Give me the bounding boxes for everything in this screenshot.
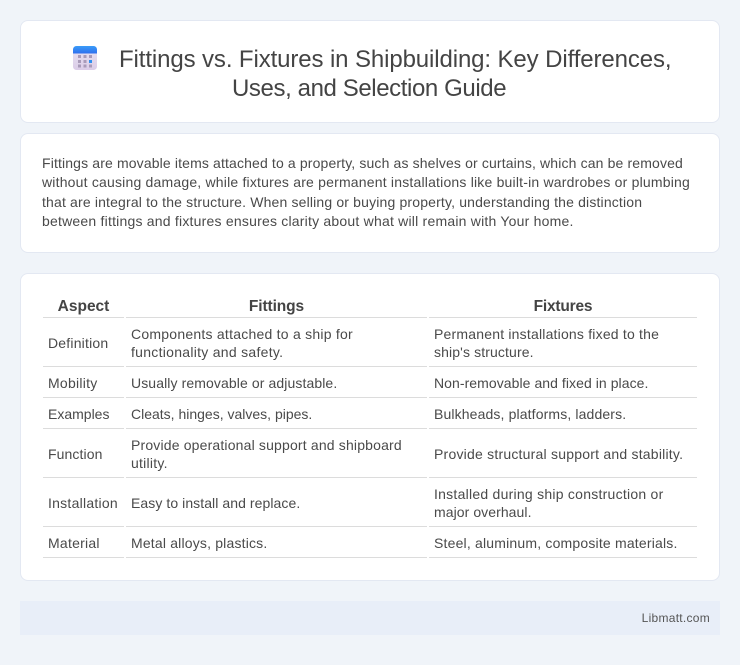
intro paragraph: that are integral to the structure. When selling or buying property, understanding the distinction: [42, 194, 642, 210]
row: definition: ship's structure.: [434, 344, 534, 360]
footer credit: Libmatt.com: [642, 611, 710, 625]
title: Fittings vs. Fixtures in Shipbuilding: Key Differences,: [119, 46, 671, 73]
footer bar: [20, 601, 720, 635]
comparison table panel: [20, 273, 720, 581]
row: function: Provide structural support and stability.: [434, 446, 683, 462]
row: material: Metal alloys, plastics.: [131, 535, 267, 551]
row: material: Steel, aluminum, composite materials.: [434, 535, 678, 551]
row: definition: Permanent installations fixed to the: [434, 326, 659, 342]
row: examples: Cleats, hinges, valves, pipes.: [131, 406, 312, 422]
table header: Fittings: [249, 298, 304, 315]
row: examples: [48, 406, 626, 422]
table header: Fixtures: [534, 298, 592, 315]
row: mobility: Non-removable and fixed in place.: [434, 375, 648, 391]
row: installation: [48, 486, 664, 520]
row: installation: Easy to install and replace.: [131, 495, 300, 511]
row: function: Provide operational support and shipboard: [131, 437, 402, 453]
row: installation: Installation: [48, 495, 118, 511]
row: mobility: Usually removable or adjustable.: [131, 375, 337, 391]
title: Uses, and Selection Guide: [232, 75, 506, 102]
row: function: [48, 437, 683, 471]
intro paragraph: Fittings are movable items attached to a property, such as shelves or curtains, which can be removed: [42, 154, 683, 170]
intro paragraph: [42, 154, 690, 229]
row: function: utility.: [131, 455, 168, 471]
title: [119, 46, 671, 102]
row: examples: Examples: [48, 406, 109, 422]
table header: [58, 298, 592, 315]
row: installation: Installed during ship construction or: [434, 486, 663, 502]
row: mobility: [48, 375, 648, 391]
row: mobility: Mobility: [48, 375, 97, 391]
row: definition: Components attached to a ship for: [131, 326, 353, 342]
row: definition: [48, 326, 659, 360]
row: examples: Bulkheads, platforms, ladders.: [434, 406, 626, 422]
intro paragraph: without causing damage, while fixtures are permanent installations like built-in wardrobes or plumbing: [42, 174, 690, 190]
row: installation: major overhaul.: [434, 504, 532, 520]
intro text panel: [20, 133, 720, 253]
header panel: [20, 20, 720, 123]
intro paragraph: between fittings and fixtures ensures clarity about what will remain with Your home.: [42, 213, 574, 229]
row: function: Function: [48, 446, 102, 462]
row: definition: Definition: [48, 335, 108, 351]
table header: Aspect: [58, 298, 109, 315]
row: material: Material: [48, 535, 100, 551]
icon: calendar grid: [73, 46, 97, 70]
row: definition: functionality and safety.: [131, 344, 283, 360]
row: material: [48, 535, 678, 551]
